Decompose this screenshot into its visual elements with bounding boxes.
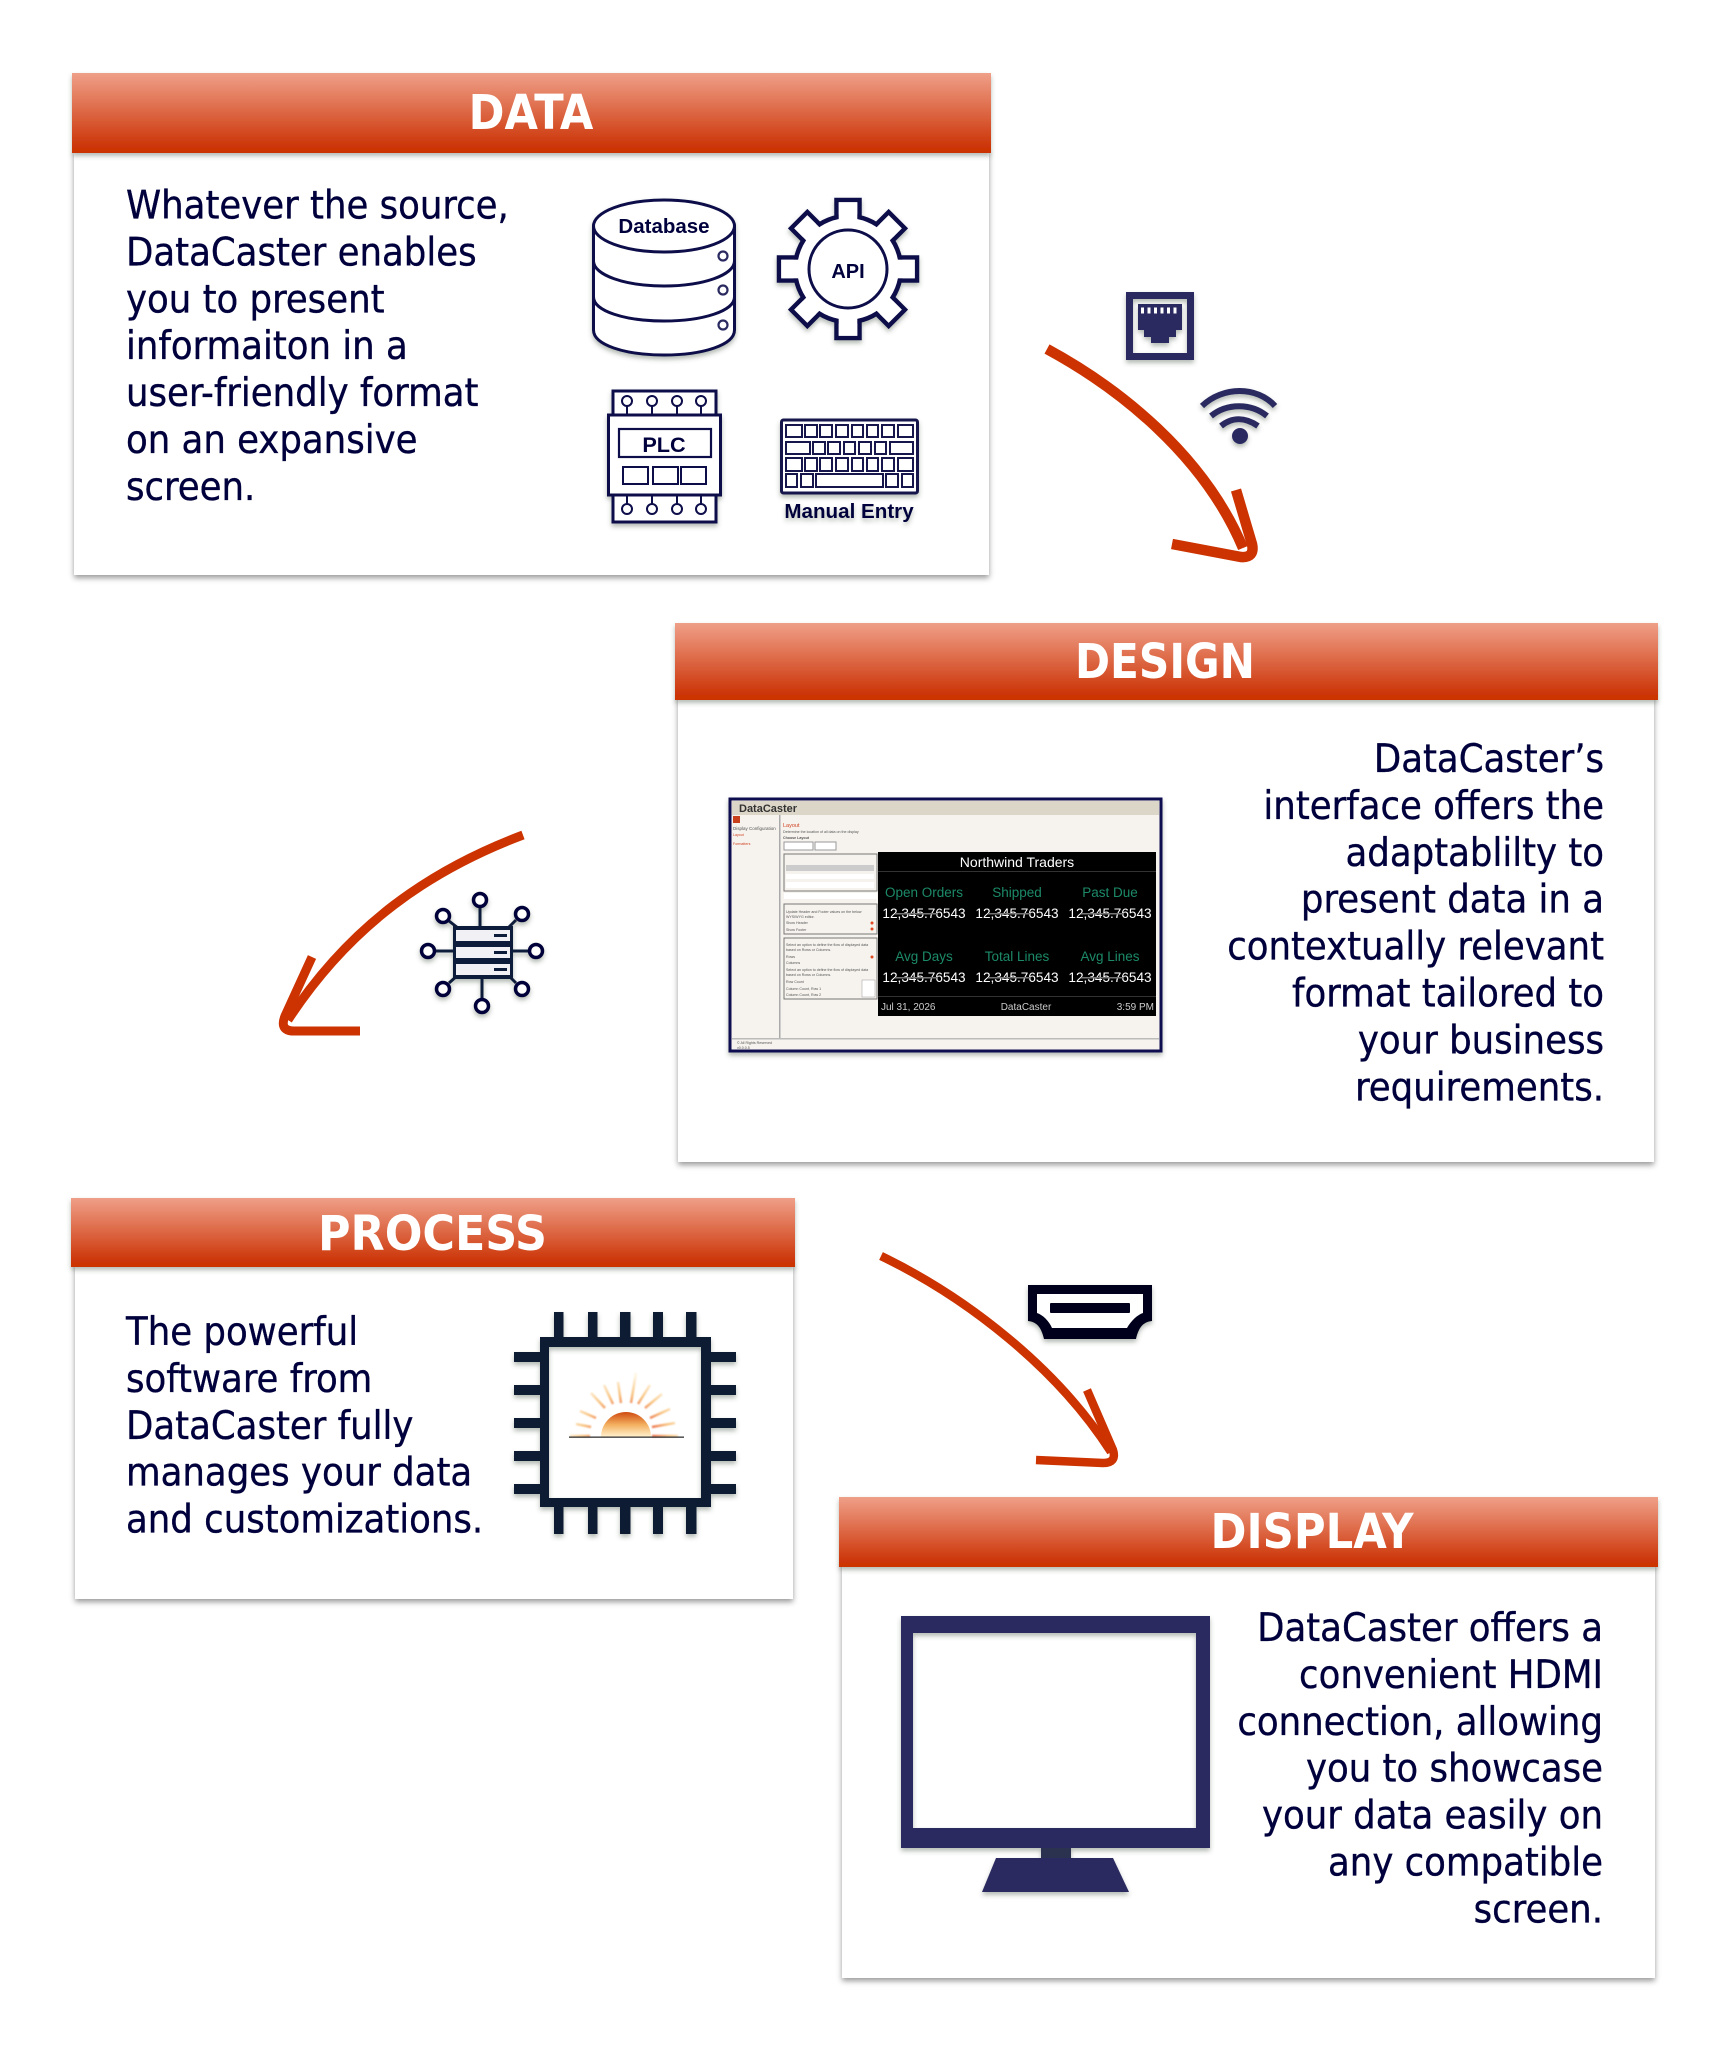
- heading: process: PROCESS: [318, 1206, 547, 1262]
- data description text: screen.: [126, 464, 255, 510]
- datacaster software screenshot: Layout: [733, 833, 744, 837]
- arrow: design to process: [283, 835, 523, 1031]
- datacaster software screenshot: DataCaster: [739, 803, 798, 815]
- datacaster software screenshot: Column Count, Row 2: [786, 993, 821, 997]
- datacaster software screenshot: Open Orders: [885, 885, 963, 900]
- icon: ethernet port: [1126, 292, 1194, 360]
- display description text: you to showcase: [1306, 1746, 1603, 1792]
- process panel body: [75, 1262, 793, 1599]
- datacaster software screenshot: Shipped: [992, 885, 1042, 900]
- datacaster software screenshot: 12,345.76543: [882, 906, 966, 921]
- heading: design: DESIGN: [1075, 634, 1255, 690]
- display panel body: [842, 1560, 1655, 1978]
- datacaster software screenshot: Show Footer: [786, 928, 807, 932]
- datacaster software screenshot: Past Due: [1082, 885, 1138, 900]
- data header bar: [72, 73, 991, 153]
- data description text: user-friendly format: [126, 370, 478, 416]
- design description text: format tailored to: [1292, 970, 1604, 1016]
- heading: data: DATA: [469, 85, 594, 141]
- datacaster software screenshot: Jul 31, 2026: [881, 1002, 936, 1013]
- process header bar: [71, 1198, 795, 1267]
- data panel body: [74, 150, 989, 575]
- datacaster software screenshot: Rows: [786, 955, 795, 959]
- datacaster software screenshot: DataCaster: [1001, 1002, 1052, 1013]
- design panel body: [678, 695, 1654, 1162]
- arrow: data to design: [1047, 349, 1253, 557]
- datacaster software screenshot: © All Rights Reserved: [737, 1041, 772, 1045]
- icon: keyboard manual entry: Manual Entry: [784, 500, 914, 523]
- panel: process: [71, 1198, 795, 1599]
- icon: wifi: [1202, 391, 1275, 444]
- datacaster software screenshot: Northwind Traders: [960, 854, 1074, 870]
- datacaster software screenshot: Update Header and Footer values on the below: [786, 910, 862, 914]
- icon: monitor: [901, 1616, 1210, 1892]
- datacaster software screenshot: based on Rows or Columns.: [786, 973, 831, 977]
- datacaster software screenshot: Display Configuration: [733, 826, 776, 831]
- datacaster software screenshot: Show Header: [786, 921, 809, 925]
- datacaster software screenshot: Avg Lines: [1080, 949, 1140, 964]
- datacaster software screenshot: Layout: [783, 823, 800, 829]
- datacaster software screenshot: Select an option to define the flow of displayed data: [786, 968, 868, 972]
- panel: display: [839, 1497, 1658, 1978]
- datacaster software screenshot: 3:59 PM: [1117, 1002, 1154, 1013]
- datacaster software screenshot: 12,345.76543: [975, 906, 1059, 921]
- icon: hdmi port: [1028, 1285, 1152, 1339]
- icon: plc: [608, 391, 720, 522]
- datacaster software screenshot: Formatters: [733, 842, 751, 846]
- arrow: process to display: [881, 1256, 1114, 1463]
- display description text: connection, allowing: [1237, 1699, 1603, 1745]
- datacaster software screenshot: Determine the location of all data on the display: [783, 830, 859, 834]
- icon: database: Database: [618, 215, 710, 238]
- panel: data: [72, 73, 991, 575]
- datacaster software screenshot: Choose Layout: [783, 836, 810, 840]
- display description text: screen.: [1474, 1886, 1603, 1932]
- process description text: and customizations.: [126, 1497, 483, 1543]
- design description text: contextually relevant: [1227, 924, 1604, 970]
- datacaster software screenshot: 12,345.76543: [1068, 906, 1152, 921]
- process description text: DataCaster fully: [126, 1403, 413, 1449]
- datacaster software screenshot: Columns: [786, 961, 800, 965]
- data description text: you to present: [126, 276, 385, 322]
- datacaster software screenshot: [730, 799, 1161, 1051]
- process description text: The powerful: [125, 1309, 358, 1355]
- design description text: adaptablilty to: [1346, 830, 1604, 876]
- data description text: DataCaster enables: [126, 229, 477, 275]
- icon: plc: PLC: [642, 432, 686, 457]
- process description text: manages your data: [126, 1450, 472, 1496]
- display description text: any compatible: [1328, 1840, 1603, 1886]
- display description text: your data easily on: [1262, 1793, 1603, 1839]
- icon: processor chip with sun: [514, 1312, 736, 1534]
- data description text: on an expansive: [126, 417, 418, 463]
- icon: api gear: [779, 200, 917, 338]
- datacaster software screenshot: Avg Days: [895, 949, 953, 964]
- icon: network server: [422, 894, 542, 1012]
- design header bar: [675, 623, 1658, 700]
- icon: keyboard manual entry: [782, 420, 918, 523]
- design description text: present data in a: [1301, 877, 1604, 923]
- icon: api gear: API: [831, 261, 865, 283]
- data description text: Whatever the source,: [126, 182, 509, 228]
- sun logo: [569, 1373, 684, 1438]
- design description text: requirements.: [1355, 1064, 1604, 1110]
- design description text: your business: [1358, 1017, 1604, 1063]
- datacaster software screenshot: Row Count: [786, 980, 804, 984]
- heading: display: DISPLAY: [1210, 1504, 1414, 1560]
- display description text: DataCaster offers a: [1257, 1605, 1603, 1651]
- icon: database: [594, 200, 734, 355]
- design description text: DataCaster’s: [1374, 736, 1604, 782]
- display header bar: [839, 1497, 1658, 1567]
- display description text: convenient HDMI: [1299, 1652, 1603, 1698]
- process description text: software from: [126, 1356, 372, 1402]
- design description text: interface offers the: [1263, 783, 1604, 829]
- datacaster software screenshot: Total Lines: [985, 949, 1050, 964]
- datacaster software screenshot: 12,345.76543: [1068, 970, 1152, 985]
- datacaster software screenshot: 12,345.76543: [975, 970, 1059, 985]
- datacaster software screenshot: 12,345.76543: [882, 970, 966, 985]
- datacaster software screenshot: WYSIWYG editor.: [786, 915, 815, 919]
- data description text: informaiton in a: [126, 323, 408, 369]
- datacaster software screenshot: based on Rows or Columns.: [786, 948, 831, 952]
- panel: design: [675, 623, 1658, 1162]
- datacaster software screenshot: Select an option to define the flow of displayed data: [786, 943, 868, 947]
- datacaster software screenshot: v0.0.0.5: [737, 1046, 750, 1050]
- datacaster software screenshot: Column Count, Row 1: [786, 987, 821, 991]
